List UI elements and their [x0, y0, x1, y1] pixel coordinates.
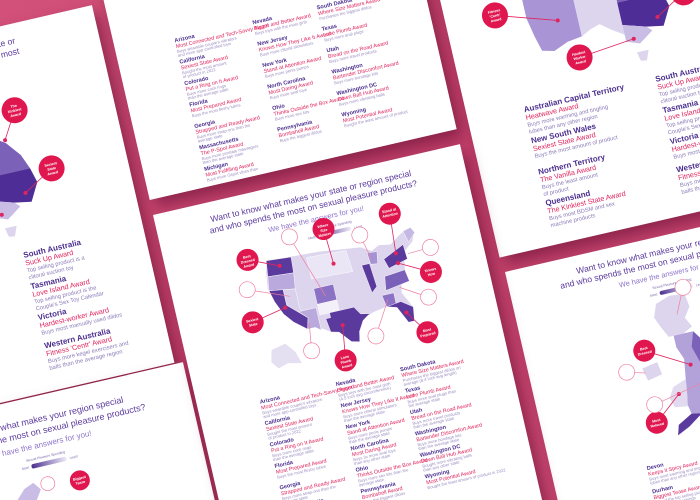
- list column 3: Wyoming: [424, 469, 451, 480]
- list column 1: Colorado: [184, 76, 210, 87]
- list column 1: Georgia: [194, 119, 217, 130]
- red callouts: Dressed: [240, 258, 255, 265]
- list column 2: Hardest-worker Award: [39, 305, 110, 330]
- list column 1: Arizona: [259, 395, 282, 406]
- list column 2: New York: [262, 57, 288, 69]
- list column 3: Buys more anal plugs than: [407, 388, 457, 404]
- headline: Want to know what makes your state or region special: [210, 168, 412, 224]
- list column 1: Devon: [646, 462, 665, 472]
- list column 2: Bigger and Better Award: [337, 375, 395, 394]
- map: Australia: [0, 100, 48, 261]
- red callouts: Size: [320, 228, 328, 233]
- legend: Most: [650, 292, 658, 298]
- list column 1: and more app-controlled toys: [177, 41, 231, 58]
- list column 1: New South Wales: [530, 122, 597, 145]
- list column 1: Florida: [274, 460, 295, 470]
- page: Australia (left): [0, 5, 174, 434]
- legend: Sexual Pleasure Spending: [312, 220, 352, 232]
- list column 1: [174, 17, 300, 183]
- list column 1: [646, 453, 700, 500]
- list column 3: Buys more anal plugs: [324, 29, 364, 43]
- list column 1: Most Fulfilling Award: [205, 162, 254, 179]
- list column 1: of product in 2022: [268, 428, 302, 441]
- list column 1: Sexiest State Award: [532, 130, 597, 153]
- callout: Fitness Centr Award: Fitness: [487, 8, 501, 15]
- list column 2: average state: [358, 477, 385, 488]
- list column 1: Buys the most fleshy lubes: [191, 102, 241, 118]
- red callouts: Best: [243, 254, 252, 260]
- outline callouts: [601, 278, 700, 419]
- list column 3: Lone Plumb Award: [406, 385, 451, 401]
- callout: Fitness Centr Award: 'Centr': [489, 13, 501, 19]
- list column 1: Colorado: [269, 437, 295, 449]
- legend: [648, 275, 700, 298]
- list column 1: Buys more Gspot vibes than: [206, 166, 259, 183]
- map: UK: [628, 285, 700, 440]
- callout: Best Dressed: [631, 330, 693, 378]
- outline callouts: [228, 197, 457, 371]
- list column 3: the average state: [408, 396, 441, 408]
- list column 3: Purchases the biggest dildos: [319, 4, 372, 21]
- red callouts: Stand at: [382, 207, 397, 214]
- red callouts: Knows: [424, 267, 437, 273]
- list column 2: Ohio: [355, 465, 369, 474]
- list column 2: Pennsylvania: [360, 481, 397, 495]
- list column 2: (4.5 inch avg circumference): [339, 385, 392, 402]
- list column 3: than the average state: [413, 415, 455, 430]
- list column 1: lubes than any other region: [650, 469, 700, 486]
- list column 1: The Vanilla Award: [539, 163, 597, 184]
- list column 1: lubes than any other region: [529, 114, 598, 136]
- legend: [20, 447, 78, 471]
- list column 1: Georgia: [279, 481, 302, 491]
- list column 1: Florida: [189, 98, 209, 109]
- list column 2: Victoria: [669, 131, 700, 146]
- page: Australia (top right): [417, 0, 700, 258]
- list column 1: Buys the most fleshy lubes: [277, 464, 326, 480]
- callout: Most Relaxed: [640, 392, 688, 436]
- list column 2: than any other state: [354, 453, 391, 466]
- list column 2: [654, 56, 700, 196]
- list column 2: Love Island Award: [31, 277, 91, 299]
- callout: Sexiest State Award: State: [47, 166, 56, 172]
- list column 2: Buys more kegel exercisers and: [47, 341, 129, 365]
- list column 1: Arizona: [174, 34, 196, 44]
- callout: Hardest Worker Award: [564, 32, 640, 73]
- callout: red: Biggest: [73, 475, 87, 482]
- list column 2: Buys more anal toys: [269, 87, 307, 100]
- list column 2: than the average state: [344, 409, 386, 423]
- legend: Sexual Pleasure Spending: [652, 277, 692, 290]
- list column 2: Most Daring Award: [268, 80, 314, 96]
- list column 2: Buys the biggest dildos: [279, 129, 322, 143]
- list column 1: Buys wearable couple's vibrators: [262, 397, 322, 415]
- red callouts: Matters: [318, 231, 332, 238]
- callout: Sexiest State (NSW): [649, 0, 700, 19]
- list column 1: Buys more cock rings: [186, 83, 227, 97]
- red callouts: Lone: [340, 355, 350, 360]
- list column 1: Put a Ring on It Award: [185, 75, 239, 93]
- callout: red: Tease: [75, 480, 86, 486]
- list column 3: Washington DC: [419, 444, 461, 459]
- list column 1: Australian Capital Territory: [523, 82, 625, 114]
- marker: Victoria: [0, 212, 4, 217]
- list column 1: and more app-controlled toys: [263, 402, 317, 419]
- list column 1: Bought the most amount: [267, 422, 313, 437]
- list column 2: Buys 3x more anal toys: [353, 448, 396, 462]
- page: UK (bottom right): [505, 201, 700, 500]
- headline: and who spends the most on sexual pleasure products?: [209, 178, 418, 236]
- callout: Fitness Centr Award: [479, 0, 560, 39]
- list column 3: Purchases the biggest dildos on: [402, 365, 462, 383]
- legend: Least: [69, 454, 78, 460]
- list column 1: Buys more strap-ons than the: [196, 122, 252, 140]
- list column 2: Couple's Sex Toy Calendar: [35, 291, 105, 312]
- list column 3: Texas: [321, 24, 338, 33]
- list column 2: Tasmania: [30, 274, 68, 291]
- map: USA: [249, 227, 438, 370]
- red callouts: Award: [341, 363, 353, 369]
- list column 1: [0, 258, 20, 405]
- list column 2: Buys more sex kits: [274, 109, 310, 122]
- list column 2: [252, 4, 353, 143]
- list column 2: New Jersey: [340, 397, 372, 410]
- list column 1: The Kinkiest State Award: [546, 189, 626, 216]
- red callouts: Plumb: [340, 358, 353, 365]
- list column 2: Nevada: [335, 378, 357, 388]
- callout: outline: [39, 475, 56, 492]
- callout: Best Dressed: Dressed: [637, 350, 652, 357]
- list column 3: Utah: [410, 407, 424, 416]
- list column 3: Buys more travel products: [412, 410, 461, 426]
- list column 2: North Carolina: [350, 438, 390, 452]
- list column 1: [259, 378, 386, 500]
- callout: Most Relaxed: Relaxed: [650, 422, 665, 429]
- list column 1: Buys more warming and tingling: [527, 104, 609, 129]
- legend: Most: [21, 465, 30, 471]
- list column 2: balls than the average region: [49, 349, 123, 372]
- list column 3: Washington: [331, 63, 364, 76]
- list column 3: Most Potential Award: [342, 107, 393, 124]
- map: UK top: [12, 482, 45, 500]
- list column 2: Pennsylvania: [277, 119, 314, 133]
- list column 2: Tasmania: [662, 98, 700, 115]
- list column 1: Heatwave Award: [525, 101, 579, 122]
- list column 1: of product in 2022: [182, 67, 217, 79]
- list column 3: Wyoming: [341, 107, 367, 119]
- legend: [306, 217, 363, 241]
- list column 1: machine products: [550, 213, 596, 229]
- list column 3: Washington DC: [336, 82, 378, 97]
- list column 3: [316, 0, 410, 128]
- list column 3: than the average state: [418, 437, 460, 451]
- callout: The Kinkiest Award: The: [10, 104, 17, 109]
- list column 2: Stand at Attention Award: [347, 418, 405, 437]
- red callouts: [223, 194, 459, 392]
- list column 2: Buys toys with the most girth: [338, 381, 391, 398]
- list column 1: than the average state: [187, 86, 230, 101]
- list column 2: Buys most manually used dildos: [41, 312, 123, 337]
- list column 2: Western Australia: [43, 326, 112, 350]
- list column 2: [22, 232, 131, 372]
- callout: Hardest Worker Award: Hardest: [572, 50, 586, 57]
- map: Australia: [512, 0, 680, 85]
- callout: Best Dressed: Best: [640, 346, 649, 352]
- callout: Most Relaxed: Most: [652, 418, 662, 424]
- red callouts: Prepared: [420, 331, 436, 338]
- list column 2: clitoral suction toy: [28, 265, 74, 281]
- list column 3: average (8.4 inch avg length): [403, 370, 458, 387]
- list column 1: Northern Territory: [537, 152, 606, 177]
- list column 1: Durham: [652, 485, 674, 495]
- legend: Most: [308, 235, 316, 241]
- legend: Least: [354, 224, 363, 230]
- list column 1: The P-Spot Award: [200, 142, 244, 157]
- list column 1: California: [179, 54, 206, 66]
- callout: The Kinkiest Award: Award: [10, 112, 21, 118]
- list column 3: Bought the least amount of product in 2022: [427, 467, 507, 490]
- list column 1: Buys most BDSM and sex: [549, 201, 616, 222]
- list column 2: North Carolina: [267, 76, 307, 91]
- list column 3: Buys more vibrating balls: [339, 92, 385, 107]
- list column 2: Thinks Outside the Box Award: [273, 96, 345, 118]
- list column 1: average state: [197, 133, 224, 144]
- list column 3: Lone Plumb Award: [323, 23, 368, 39]
- list column 3: Buys more bondage kits: [417, 432, 462, 447]
- list column 3: Buys more travel products: [329, 48, 377, 64]
- list column 1: Queensland: [545, 189, 591, 208]
- callout: Sexiest State Award: Sexiest: [44, 161, 58, 168]
- list column 2: Suck Up Award: [24, 248, 74, 268]
- list column 2: Victoria: [37, 307, 68, 322]
- list column 2: [335, 366, 436, 500]
- list column 3: Bought more vibrating balls: [422, 452, 472, 469]
- list column 2: Thinks Outside the Box Award: [356, 458, 428, 480]
- list column 2: Most Daring Award: [351, 442, 397, 458]
- subtitle: We have the answers for you!: [267, 204, 365, 234]
- list column 2: Stand at Attention Award: [263, 56, 322, 75]
- list column 1: Sexiest State Award: [266, 416, 314, 433]
- list column 1: Strapped and Ready Award: [280, 477, 346, 497]
- page: US map (center): [153, 144, 554, 500]
- red callouts: Where: [317, 223, 329, 229]
- list column 1: Put a Ring on It Award: [271, 436, 324, 454]
- red callouts: Award: [243, 263, 255, 269]
- list column 1: Buys the most amount of product: [534, 135, 619, 160]
- list column 1: Buys more prostate massagers: [201, 143, 259, 161]
- red callouts: State: [249, 322, 258, 328]
- list column 2: Buys more clitoral stimulators: [343, 402, 397, 419]
- list column 1: than the average state: [273, 448, 315, 462]
- list column 3: South Dakota: [400, 359, 437, 373]
- list column 3: Down Ball Hub Award: [337, 85, 389, 103]
- list column 1: California: [264, 415, 292, 427]
- list column 3: Bread on the Road Award: [328, 40, 389, 60]
- red callouts: Most: [422, 327, 432, 333]
- red callouts: How: [427, 272, 436, 277]
- page: UK (bottom left): [0, 362, 250, 500]
- list column 1: Most Connected and Tech-Savvy Award: [175, 23, 270, 50]
- list column 1: Most Prepared Award: [190, 97, 242, 114]
- list column 3: Bought the least amount of product: [343, 109, 409, 128]
- list column 1: Buys wearable couple's vibrators: [176, 35, 237, 54]
- page: US awards list (top middle): [71, 0, 457, 200]
- list column 1: Buys the least amount: [541, 172, 599, 191]
- list column 3: Bread on the Road Award: [411, 402, 472, 422]
- callout: Sexiest State Award: [17, 153, 69, 195]
- list column 3: Most Potential Award: [426, 469, 476, 486]
- list column 1: Sexiest State Award: [180, 55, 229, 72]
- list column 2: New York: [345, 419, 372, 431]
- red callouts: Sexiest: [246, 317, 260, 324]
- list column 2: than the average state: [349, 430, 391, 445]
- list column 2: Buys more clitoral stimulators: [259, 40, 314, 57]
- list column 2: Buys more penis pumps: [264, 64, 309, 79]
- list column 1: Massachusetts: [199, 137, 239, 151]
- list column 1: Keeps it Spicy Award: [648, 461, 698, 478]
- list column 1: than the average state: [202, 151, 245, 165]
- list column 3: Utah: [326, 46, 340, 54]
- callout: The Kinkiest Award: [0, 95, 34, 143]
- list column 3: Washington: [414, 424, 447, 438]
- callout: Sexiest State Award: Award: [47, 170, 59, 176]
- list column 3: Texas: [405, 385, 421, 395]
- list column 2: Knows How They Like It Award: [258, 31, 332, 54]
- list column 3: [400, 349, 507, 490]
- list column 2: Buys toys with the most girth: [254, 19, 308, 36]
- list column 2: Buys more sex kits than the: [358, 467, 409, 484]
- list column 2: Top selling product is the: [34, 285, 97, 306]
- callout: The Kinkiest Award: Kinkiest: [7, 107, 23, 114]
- list column 2: Fitness 'Centr' Award: [45, 334, 113, 358]
- callout: Hardest Worker Award: Worker: [573, 54, 587, 61]
- callout: red: [68, 468, 92, 492]
- list column 2: Top selling product is a: [27, 255, 86, 274]
- list column 2: Bombshell Award: [278, 124, 320, 139]
- list column 2: New Jersey: [257, 35, 289, 48]
- list column 3: Bartender Discomfort Award: [332, 61, 399, 82]
- list column 3: than any other state: [423, 459, 461, 473]
- list column 1: [523, 82, 652, 229]
- list column 1: Bought the most amount: [181, 60, 228, 75]
- list column 2: South Australia: [22, 238, 82, 260]
- callout: Fitness Centr Award: Award: [490, 17, 502, 23]
- list column 2: Bigger and Better Award: [253, 13, 311, 32]
- list column 2: Nevada: [252, 16, 274, 26]
- legend: Sexual Pleasure Spending: [26, 450, 66, 463]
- list column 1: Most Prepared Award: [275, 458, 327, 476]
- list column 1: of product: [543, 186, 570, 198]
- red callouts: Attention: [382, 211, 398, 219]
- list column 1: Strapped and Ready Award: [195, 115, 261, 136]
- list column 2: Buys more penis pumps: [348, 426, 393, 441]
- list column 3: Buys more bondage kits: [334, 71, 378, 85]
- list column 3: Down Ball Hub Award: [421, 447, 473, 465]
- callout: Hardest Worker Award: Award: [575, 59, 586, 66]
- list column 1: Michigan: [204, 161, 229, 173]
- list column 1: Most Connected and Tech-Savvy Award: [261, 384, 355, 412]
- list column 2: Knows How They Like It Award: [342, 393, 415, 415]
- list column 3: Where Size Matters Award: [401, 359, 464, 379]
- list column 2: Ohio: [272, 103, 286, 112]
- list column 1: Buys more cock rings: [272, 444, 312, 458]
- list column 3: Bartender Discomfort Award: [416, 422, 483, 443]
